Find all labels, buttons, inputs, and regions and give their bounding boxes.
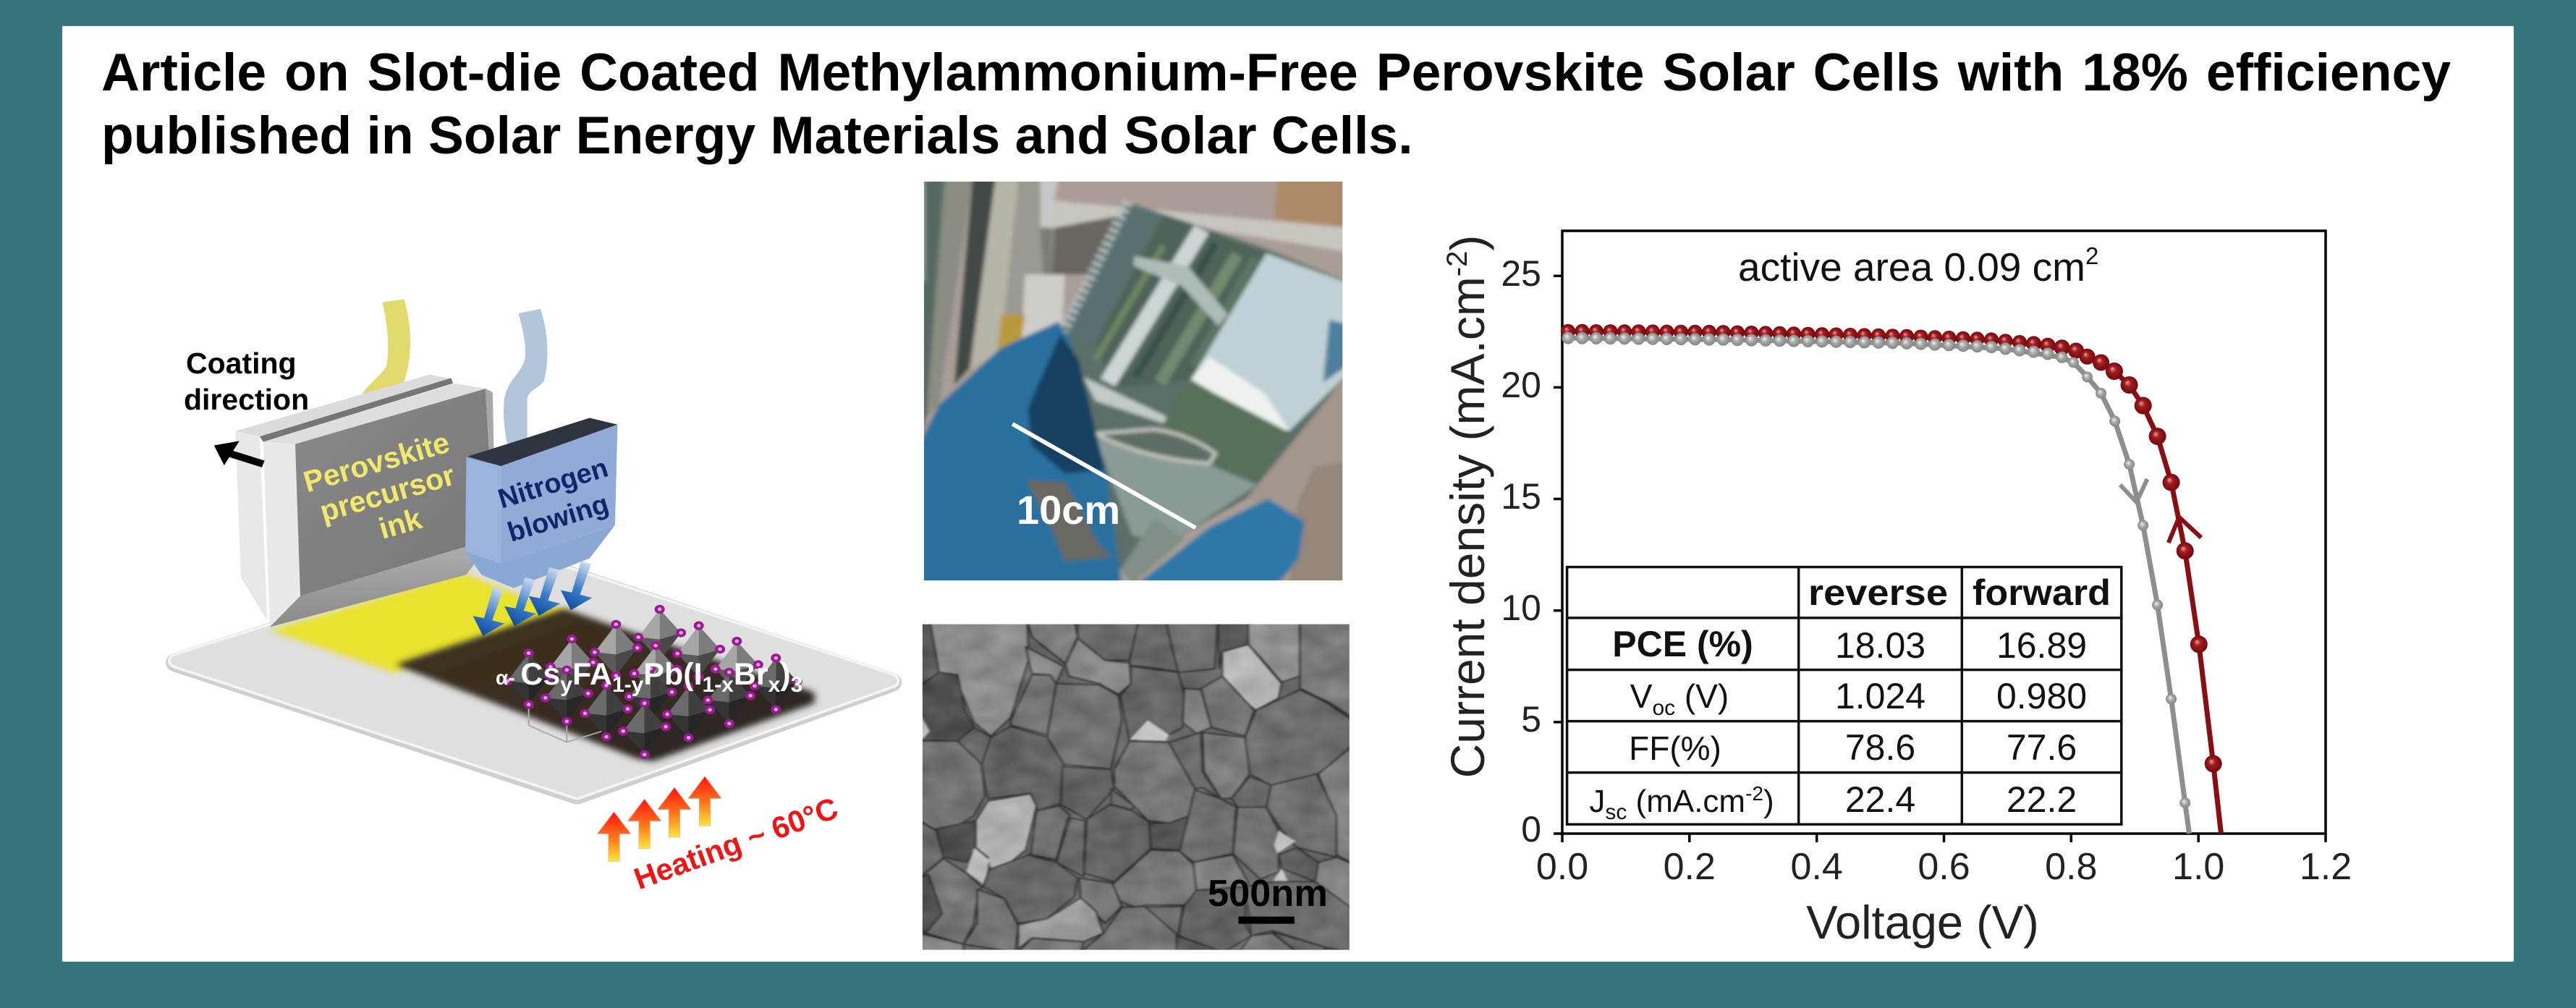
y axis tick labels: 20 [1501, 365, 1541, 405]
label: perovskite formula: Pb(I [643, 657, 703, 692]
row: Voc: (V) [1675, 677, 1729, 715]
10cm scale line [1012, 424, 1195, 528]
row: Jsc: J [1589, 784, 1605, 819]
forward direction arrow [2169, 517, 2201, 543]
label: perovskite formula: 1-y [612, 673, 644, 697]
label: perovskite precursor ink: ink [375, 501, 425, 546]
panel: SEM micrograph [919, 622, 1352, 952]
label: perovskite formula: FA [572, 657, 612, 692]
row: Jsc: 22.4 [1845, 779, 1915, 820]
y axis tick labels: 25 [1501, 253, 1541, 294]
reverse direction arrow [2120, 479, 2148, 502]
active area note: active area 0.09 cm [1738, 245, 2085, 289]
perovskite grains [919, 622, 1352, 952]
panel: J-V chart [1441, 231, 2352, 949]
label: perovskite formula: 1-x [703, 673, 734, 697]
y axis tick labels: 5 [1521, 699, 1541, 740]
table header [1808, 572, 2111, 613]
x axis tick labels: 0.8 [2045, 846, 2097, 888]
y axis title: ) [1441, 235, 1494, 251]
nitrogen flow arrows [473, 562, 592, 636]
title [101, 43, 2451, 165]
y axis tick labels: 0 [1521, 809, 1541, 850]
label: perovskite precursor ink: precursor [316, 458, 459, 528]
y axis tick labels [1501, 253, 1541, 850]
row: Voc: 0.980 [1996, 676, 2087, 716]
label: coating direction: direction [184, 383, 309, 416]
heating arrows [597, 776, 721, 861]
500nm scale bar [1238, 917, 1295, 924]
label: perovskite precursor ink [300, 425, 459, 546]
x axis tick labels: 0.0 [1536, 846, 1588, 888]
parameters table [1567, 567, 2122, 824]
label: coating direction: Coating [186, 347, 297, 380]
row: Jsc: (mA.cm [1627, 784, 1745, 819]
label: nitrogen blowing: Nitrogen [495, 453, 611, 514]
row: FF: 78.6 [1845, 727, 1915, 768]
row: PCE [1612, 624, 2087, 666]
row: Jsc: ) [1763, 784, 1774, 819]
row: FF [1629, 727, 2077, 768]
label: perovskite formula: ) [780, 657, 791, 692]
x axis tick labels: 1.0 [2172, 846, 2224, 888]
yellow wet film [270, 573, 572, 674]
slot-die coater [235, 375, 495, 627]
row: FF: 77.6 [2007, 727, 2077, 768]
active area note: 2 [2085, 242, 2098, 269]
reverse curve (grey) [1562, 332, 2190, 834]
x axis tick labels: 0.2 [1664, 846, 1716, 888]
label: perovskite formula: 3 [791, 673, 802, 697]
label: 500nm: 500nm [1208, 873, 1328, 915]
row: Jsc: sc [1605, 800, 1627, 824]
dark perovskite film [399, 610, 813, 760]
row: PCE: 18.03 [1835, 625, 1925, 666]
row: FF: FF(%) [1629, 729, 1721, 767]
y axis tick labels: 10 [1501, 588, 1541, 628]
y axis title: Current density (mA.cm [1441, 276, 1494, 778]
x axis tick labels: 0.6 [1918, 846, 1970, 888]
row: Voc: oc [1652, 696, 1675, 720]
row: PCE: 16.89 [1996, 625, 2087, 666]
table header: reverse [1808, 572, 1948, 613]
title: Article on Slot-die Coated Methylammonium-Free Perovskite Solar Cells with 18% efficiency [101, 43, 2451, 102]
label: perovskite formula: α- Cs [496, 657, 560, 692]
x axis title: Voltage (V) [1806, 896, 2039, 949]
row: PCE: PCE (%) [1612, 624, 1753, 664]
y axis tick labels: 15 [1501, 476, 1541, 517]
x axis tick labels: 1.2 [2300, 846, 2352, 888]
row: Jsc: -2 [1745, 782, 1763, 805]
yellow ink tube [356, 299, 410, 411]
row: Jsc [1589, 779, 2077, 824]
coating direction arrow [214, 441, 263, 465]
photo scene [919, 177, 1348, 585]
title: published in Solar Energy Materials and Solar Cells. [101, 106, 1413, 165]
nitrogen blower [465, 418, 617, 588]
plot frame and ticks [1554, 231, 2326, 842]
panel: slot-die coating schematic [177, 299, 891, 896]
label: perovskite formula: y [560, 673, 572, 697]
label: perovskite precursor ink: Perovskite [300, 425, 453, 499]
label: nitrogen blowing: blowing [504, 488, 612, 549]
label: heating: Heating ~ 60°C [630, 791, 842, 896]
y axis title: -2 [1441, 251, 1473, 276]
substrate plate [177, 555, 891, 795]
row: Jsc: 22.2 [2007, 779, 2077, 820]
forward curve (red) [1561, 324, 2222, 834]
row: Voc: 1.024 [1835, 676, 1925, 716]
label: perovskite formula: x [768, 673, 781, 697]
row: Voc [1630, 676, 2087, 720]
perovskite crystal lattice [504, 606, 801, 758]
label: perovskite formula: Br [734, 657, 768, 692]
x axis tick labels [1536, 846, 2352, 888]
label: nitrogen blowing [495, 453, 612, 549]
blue nitrogen tube [504, 309, 547, 443]
panel: photo of 10cm coated substrate [919, 177, 1348, 585]
label: 10cm: 10cm [1017, 487, 1120, 533]
row: Voc: V [1630, 677, 1652, 715]
x axis tick labels: 0.4 [1791, 846, 1843, 888]
table header: forward [1973, 572, 2111, 613]
